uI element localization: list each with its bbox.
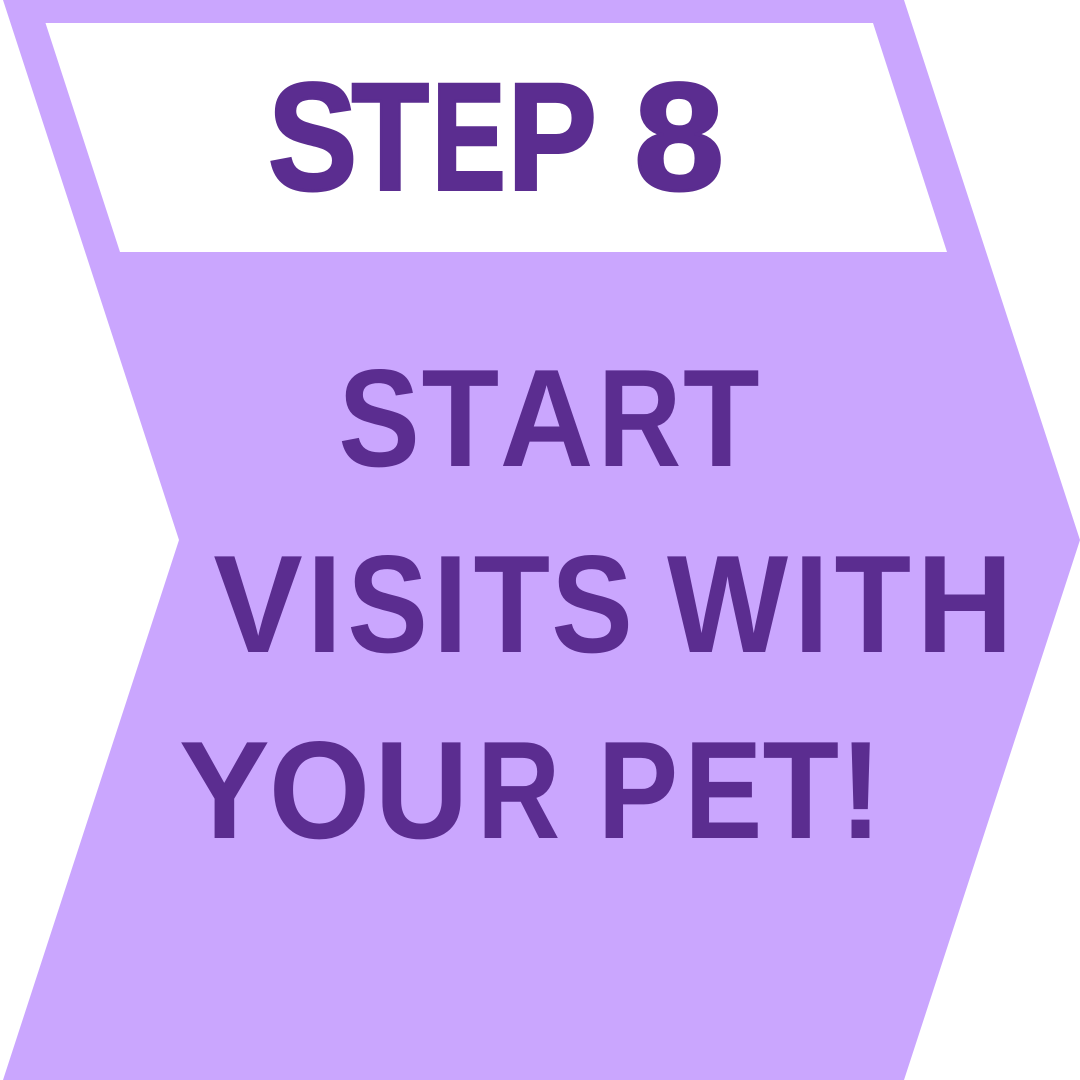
heading: step 8: T (352, 51, 429, 222)
text block: start visits with your pet: T (422, 341, 499, 496)
text block: start visits with your pet: S (338, 340, 420, 496)
text block: start visits with your pet: E (684, 713, 762, 868)
text block: start visits with your pet: O (269, 712, 370, 868)
text block: start visits with your pet: I (433, 528, 468, 682)
heading: step 8: E (432, 52, 506, 223)
text block: start visits with your pet: R (477, 713, 560, 868)
text block: start visits with your pet: H (916, 526, 1013, 681)
text block: start visits with your pet: S (347, 526, 428, 682)
text block: start visits with your pet: Y (179, 713, 270, 868)
heading: step 8: 8 (634, 52, 724, 222)
text block: start visits with your pet: T (834, 527, 911, 682)
heading: step 8: P (507, 51, 597, 222)
text block: start visits with your pet: V (213, 526, 303, 682)
text block: start visits with your pet: W (667, 527, 789, 682)
text block: start visits with your pet: S (551, 526, 633, 682)
text block: start visits with your pet: U (375, 712, 468, 868)
text block: start visits with your pet: T (474, 527, 550, 682)
text block: start visits with your pet: ! (840, 713, 882, 868)
text block: start visits with your pet: A (500, 340, 594, 496)
panel: white header box (46, 23, 947, 252)
text block: start visits with your pet: I (307, 528, 342, 682)
text block: start visits with your pet: R (598, 341, 681, 496)
text block: start visits with your pet (179, 340, 1013, 868)
text block: start visits with your pet: P (598, 712, 678, 868)
text block: start visits with your pet: T (683, 341, 760, 496)
heading: step 8: S (268, 52, 357, 222)
text block: start visits with your pet: T (762, 713, 839, 868)
text block: start visits with your pet: I (794, 528, 829, 682)
heading: step 8 (268, 51, 724, 223)
